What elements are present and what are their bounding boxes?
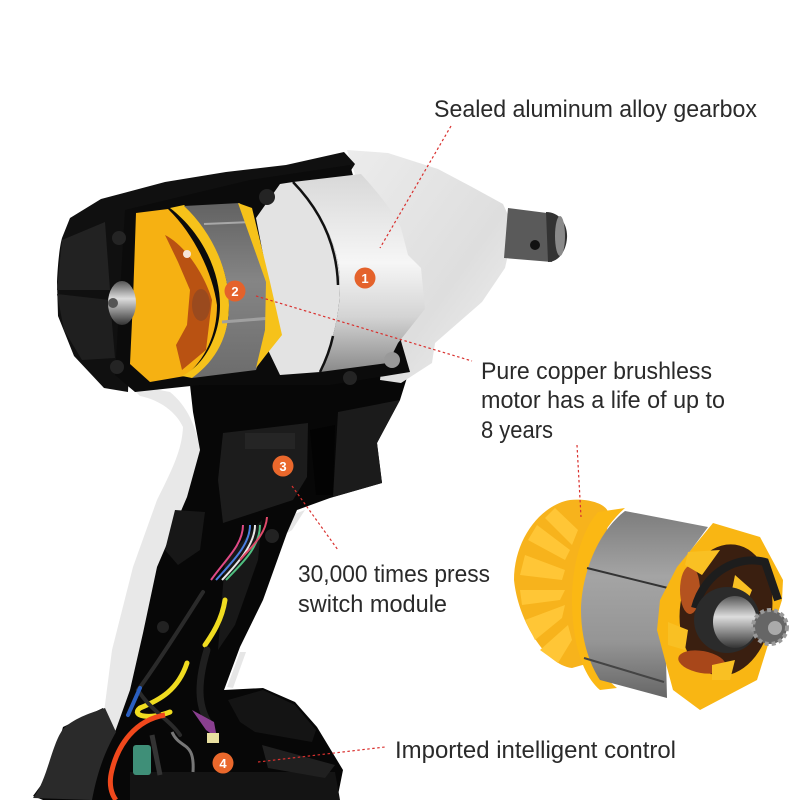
badge 1 — [354, 268, 376, 288]
yellow motor end cap — [130, 209, 217, 382]
badge 2: 2 — [231, 284, 239, 299]
handle screws — [110, 189, 400, 385]
badge 3: 3 — [279, 459, 287, 474]
right yellow housing — [657, 523, 783, 710]
head interior black — [115, 165, 410, 392]
black arc between cover and gearbox — [293, 182, 338, 372]
leader line: control — [258, 747, 385, 762]
label: motor: motor has a life of up to — [481, 387, 725, 414]
interior opening — [671, 538, 781, 682]
battery base dark plastic — [33, 690, 340, 800]
fan — [514, 500, 608, 668]
white motor cover — [256, 182, 340, 375]
leader line: motor — [256, 296, 472, 361]
label: motor — [481, 358, 725, 444]
leader line: switch — [292, 486, 338, 550]
badge 4: 4 — [219, 756, 227, 771]
label: switch — [298, 561, 490, 618]
illustration: brushless motor — [514, 500, 787, 710]
switch module — [218, 400, 400, 523]
grip white outer shell — [103, 384, 305, 732]
rear bearing — [108, 281, 136, 325]
gearbox nose silver — [347, 150, 514, 383]
steel stator — [581, 511, 708, 698]
leader line: motor detail — [577, 445, 581, 517]
left yellow ring — [572, 508, 625, 690]
aluminum gearbox section — [293, 174, 425, 372]
grip interior detail — [157, 510, 279, 650]
anvil socket — [504, 208, 567, 262]
switch wires — [211, 517, 267, 580]
housing black rim — [57, 152, 355, 392]
badge 4 — [212, 752, 234, 774]
label: control: Imported intelligent control — [395, 737, 676, 764]
label: motor: 8 years — [481, 417, 553, 444]
yellow and black wires — [128, 592, 225, 735]
label: motor: Pure copper brushless — [481, 358, 712, 385]
black wires — [695, 560, 778, 608]
lower wires, red cable and capacitor — [110, 710, 219, 800]
copper windings — [676, 566, 728, 677]
bearing — [694, 587, 760, 653]
yellow stator ring — [170, 205, 229, 378]
grip black body — [33, 368, 410, 800]
copper coils — [165, 235, 212, 370]
stator laminations — [184, 203, 272, 378]
badge 3 — [272, 456, 294, 476]
pinion gear — [753, 610, 787, 644]
label: gearbox: Sealed aluminum alloy gearbox — [434, 96, 757, 123]
label: switch: 30,000 times press — [298, 561, 490, 588]
back panels — [57, 222, 115, 360]
yellow inner tabs — [668, 550, 752, 680]
label: switch: switch module — [298, 591, 447, 618]
badge 2 — [224, 280, 246, 302]
illustration: impact wrench cutaway — [33, 150, 567, 800]
badge 1: 1 — [361, 271, 369, 286]
leader line: gearbox — [380, 126, 451, 248]
yellow stator tabs — [238, 203, 282, 368]
